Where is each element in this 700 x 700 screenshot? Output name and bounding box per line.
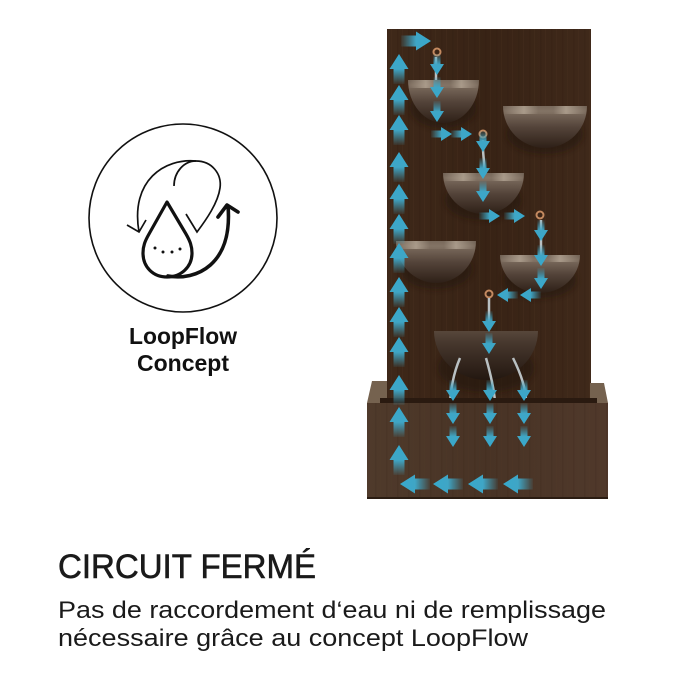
description: [58, 597, 606, 652]
planter box: [367, 381, 608, 499]
thin loop arrow: [174, 161, 220, 232]
copper spouts: [434, 48, 544, 298]
up flow arrows: [390, 54, 408, 475]
top right arrow: [401, 32, 431, 50]
wooden back panel: [387, 29, 591, 404]
badge circle: [89, 124, 277, 312]
title: CIRCUIT FERMÉ: [58, 548, 316, 586]
bowl 1: [408, 80, 479, 123]
bowl shadows: [400, 88, 583, 392]
bowl 5: [500, 255, 580, 293]
drop dots: [154, 246, 182, 254]
description: nécessaire grâce au concept LoopFlow: [58, 625, 529, 652]
bowl 4: [396, 241, 476, 283]
down flow arrows: [430, 54, 548, 447]
LoopFlow label: LoopFlow: [129, 323, 237, 349]
icon: LoopFlow badge: [89, 124, 277, 312]
water drop: [143, 202, 192, 277]
sideways flow arrows: [431, 127, 541, 302]
thin curved arrow: [127, 161, 196, 232]
bowl 3: [443, 173, 524, 214]
water streams: [436, 57, 541, 402]
bowl 6: [434, 331, 538, 380]
bottom left arrows: [400, 474, 533, 494]
thick arrow: [168, 205, 238, 277]
LoopFlow label: Concept: [137, 350, 229, 376]
bowl 2: [503, 106, 587, 148]
fountain product photo: [367, 29, 608, 499]
LoopFlow label: [129, 323, 237, 376]
description: Pas de raccordement d‘eau ni de remplissage: [58, 597, 606, 624]
